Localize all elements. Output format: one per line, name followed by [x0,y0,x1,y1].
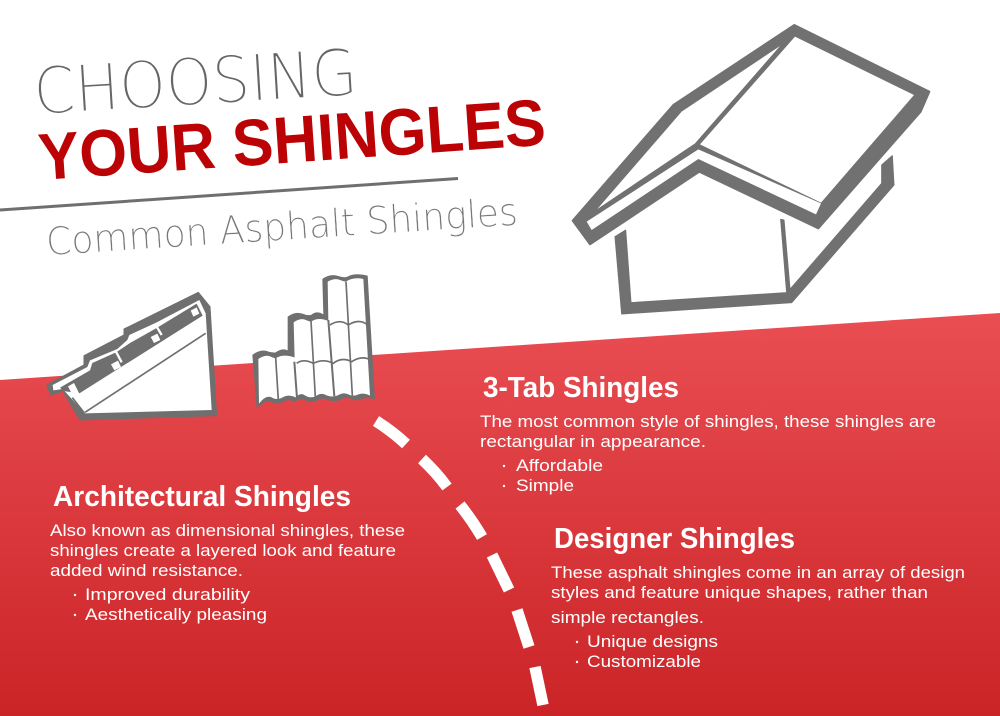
description: architectural shingles: added wind resistance. [50,562,243,580]
icon: designer shingles [252,274,375,408]
description: architectural shingles: shingles create a layered look and feature [50,542,396,560]
bullet list: designer shingles: Customizable [587,653,701,671]
title line: Your Shingles: YOUR SHINGLES [36,85,548,194]
panel: 3-tab shingles [480,372,936,495]
description: 3-tab shingles: The most common style of shingles, these shingles are [480,413,936,431]
bullet list: designer shingles: Unique designs [587,633,718,651]
red background panel [0,313,1000,716]
heading: designer shingles: Designer Shingles [554,523,795,555]
bullet list: 3-tab shingles: Simple [516,477,574,495]
bullet list: architectural shingles: Improved durability [85,586,251,604]
bullet list: 3-tab shingles [503,457,603,495]
description: designer shingles [551,564,965,627]
description: architectural shingles [50,522,405,580]
subtitle: Common Asphalt Shingles [45,190,519,264]
title divider [0,178,458,210]
description: designer shingles: styles and feature unique shapes, rather than [551,584,928,602]
bullet list: 3-tab shingles: Affordable [516,457,603,475]
title [31,35,548,194]
description: 3-tab shingles [480,413,936,451]
panel: designer shingles [551,523,965,671]
panel: architectural shingles [50,481,405,624]
description: designer shingles: These asphalt shingles come in an array of design [551,564,965,582]
heading: 3-tab shingles: 3-Tab Shingles [483,372,679,404]
description: architectural shingles: Also known as dimensional shingles, these [50,522,405,540]
heading: architectural shingles: Architectural Shingles [53,481,351,513]
bullet list: architectural shingles: Aesthetically pleasing [85,606,267,624]
bullet list: architectural shingles [74,586,267,624]
description: designer shingles: simple rectangles. [551,609,704,627]
icon: architectural shingles [47,292,217,420]
description: 3-tab shingles: rectangular in appearance. [480,433,706,451]
title line: Choosing: CHOOSING [31,35,359,130]
bullet list: designer shingles [576,633,718,671]
dashed path [376,421,543,705]
icon: house with roof [573,25,929,314]
